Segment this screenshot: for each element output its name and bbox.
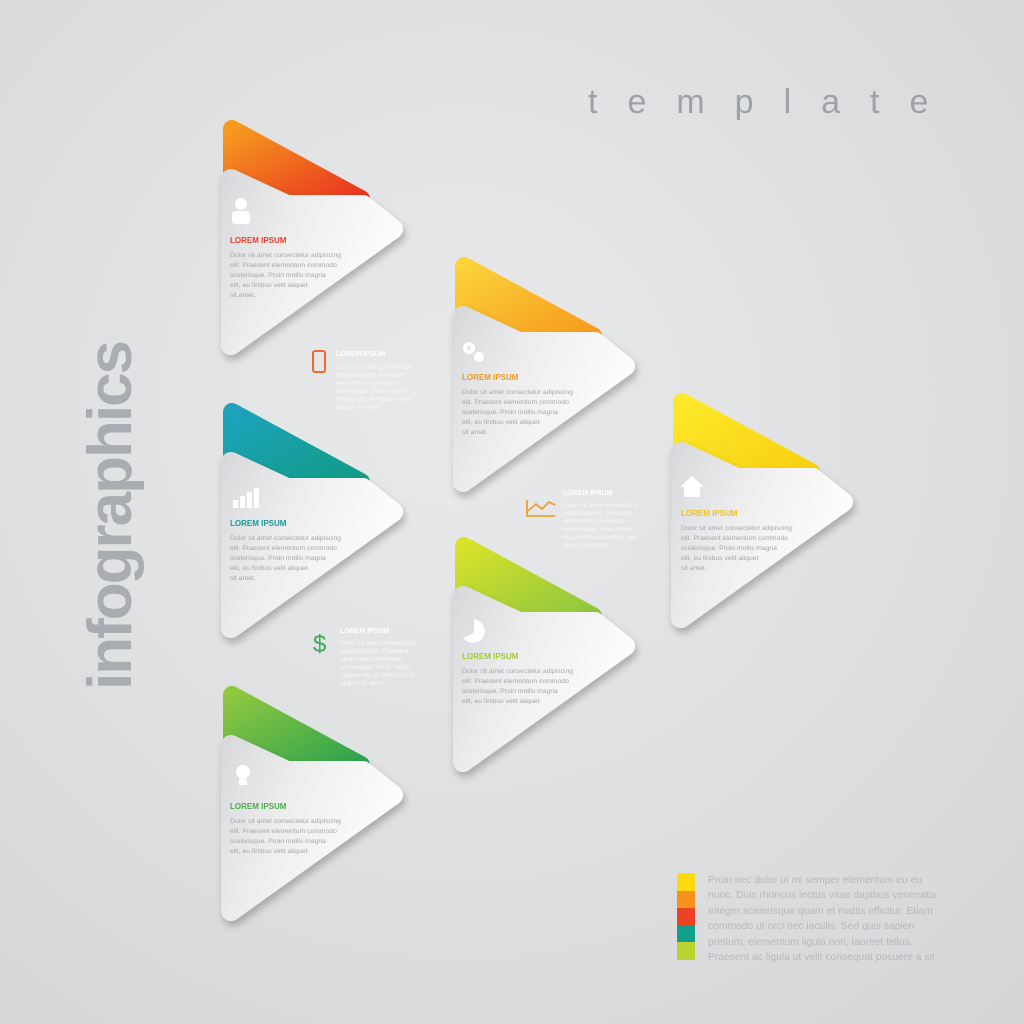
text block: elit. Praesent elementum commodo [681,535,788,542]
text block: scelerisque. Proin mollis magna [230,272,326,279]
text block: Dolor sit amet consectetur adipiscing [230,535,341,542]
text block: elit, eu finibus velit aliquet [462,698,540,705]
legend text: Proin nec dolor ut mi semper elementum eu eu [708,875,922,886]
icon: phone [313,351,325,372]
text block: elit, eu finibus velit aliquet [230,565,308,572]
mini note: dollar: Dolor sit amet consectetur [340,640,416,647]
mini note: phone: scelerisque. Proin mollis [336,388,407,395]
heading: LOREM IPSUM [230,519,287,528]
mini note: phone: elementum commodo [336,380,399,387]
heading: LOREM IPSUM [681,509,738,518]
icon: light bulb [236,765,250,785]
text block: elit. Praesent elementum commodo [462,678,569,685]
legend text: nunc. Duis rhoncus lectus vitae dapibus venenatis. [708,890,939,901]
text block: scelerisque. Proin mollis magna [462,409,558,416]
text block: Dolor sit amet consectetur adipiscing [230,818,341,825]
mini note: growth chart [527,490,639,549]
text block: scelerisque. Proin mollis magna [462,688,558,695]
card 3: teal [230,412,393,628]
mini note: growth chart: aliquet sit amet. [563,542,609,549]
mini note: phone: Dolor sit amet consectetur [336,364,412,371]
mini note: growth chart: magna elit, eu finibus velit [563,534,638,541]
mini note: growth chart: Dolor sit amet consectetur [563,502,639,509]
text block: sit amet. [681,565,707,572]
heading: LOREM IPSUM [230,802,287,811]
text block: elit, eu finibus velit aliquet [230,848,308,855]
mini note: phone: aliquet sit amet. [336,404,382,411]
legend [677,873,939,963]
icon: pie chart [463,619,485,643]
text block: elit. Praesent elementum commodo [462,399,569,406]
mini note: phone [313,351,412,411]
mini note: growth chart: elementum commodo [563,518,626,525]
text block: scelerisque. Proin mollis magna [230,838,326,845]
mini note: growth chart: LOREM IPSUM [563,490,613,497]
vertical title: infographics: infographics [76,342,145,690]
icon: person [232,198,250,224]
text block: Dolor sit amet consectetur adipiscing [230,252,341,259]
text block: elit, eu finibus velit aliquet [230,282,308,289]
text block: scelerisque. Proin mollis magna [681,545,777,552]
heading: LOREM IPSUM [230,236,287,245]
card 5: yellow [680,402,843,618]
text block: elit, eu finibus velit aliquet [462,419,540,426]
legend text: Praesent ac ligula ut velit consequat posuere a sit [708,952,935,963]
text block: elit, eu finibus velit aliquet [681,555,759,562]
text block: elit. Praesent elementum commodo [230,828,337,835]
mini note: growth chart: adipiscing elit. Praesent [563,510,632,517]
icon: line chart [527,500,555,516]
icon: house [680,476,704,497]
text block: Dolor sit amet consectetur adipiscing [462,668,573,675]
mini note: phone: LOREM IPSUM [336,351,386,358]
icon: bar chart [233,488,259,508]
card 4: lime [462,546,625,762]
card 6: green [230,695,393,911]
title: template: template [588,83,958,121]
legend text: Integer scelerisque quam et mattis efficitur. Etiam [708,906,933,917]
icon: dollar: $ [313,631,326,658]
mini note: phone: magna elit, eu finibus velit [336,396,411,403]
card 1: orange [230,129,393,345]
heading: LOREM IPSUM [462,652,519,661]
mini note: dollar: adipiscing elit. Praesent [340,648,409,655]
mini note: growth chart: scelerisque. Proin mollis [563,526,634,533]
legend text: commodo ut orci nec iaculis. Sed quis sapien [708,921,914,932]
mini note: dollar: elementum commodo [340,656,403,663]
icon: gears [463,342,484,362]
card 2: yellow-orange [462,266,625,482]
text block: scelerisque. Proin mollis magna [230,555,326,562]
legend text: pretium, elementum ligula non, laoreet tellus. [708,937,913,948]
mini note: dollar: aliquet sit amet. [340,680,386,687]
text block: elit. Praesent elementum commodo [230,545,337,552]
text block: sit amet. [230,292,256,299]
mini note: phone: adipiscing elit. Praesent [336,372,405,379]
text block: Dolor sit amet consectetur adipiscing [681,525,792,532]
text block: elit. Praesent elementum commodo [230,262,337,269]
text block: sit amet. [462,429,488,436]
text block: Dolor sit amet consectetur adipiscing [462,389,573,396]
text block: sit amet. [230,575,256,582]
mini note: dollar [313,628,416,687]
mini note: dollar: scelerisque. Proin mollis [340,664,411,671]
heading: LOREM IPSUM [462,373,519,382]
mini note: dollar: magna elit, eu finibus velit [340,672,415,679]
mini note: dollar: LOREM IPSUM [340,628,390,635]
